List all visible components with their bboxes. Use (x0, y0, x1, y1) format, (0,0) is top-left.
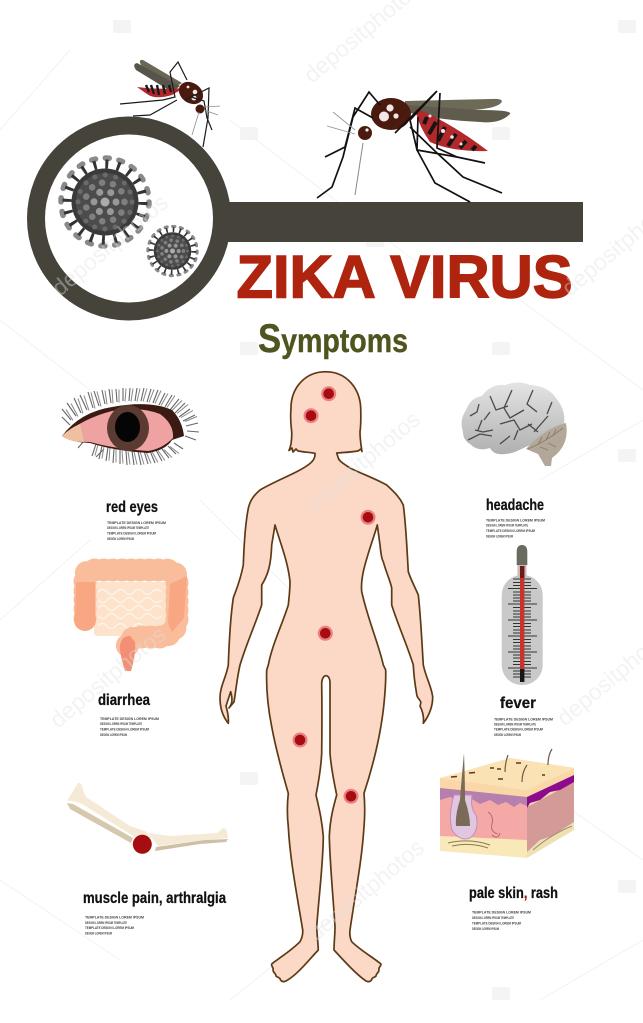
placeholder text: TEMPLATE DESIGN LOREM IPSUM (486, 518, 545, 522)
placeholder text: DESIGN LOREM IPSUM (472, 927, 499, 931)
placeholder text: DESIGN LOREM IPSUM TEMPLATE (494, 722, 536, 726)
label: fever (500, 695, 536, 712)
placeholder text: TEMPLATE DESIGN LOREM IPSUM (494, 728, 543, 732)
label: red eyes (106, 499, 158, 516)
symptom marker: knee (344, 789, 358, 804)
icon: small mosquito (120, 60, 220, 147)
placeholder text: TEMPLATE DESIGN LOREM IPSUM (472, 922, 521, 926)
symptom marker: chest (360, 510, 376, 525)
label: pale skin, rash (469, 885, 558, 902)
panel: fever (494, 545, 553, 737)
subtitle: Symptoms (258, 317, 408, 361)
icon: red eye (62, 388, 199, 465)
symptom marker: abdomen (318, 626, 333, 641)
placeholder text: DESIGN LOREM IPSUM TEMPLATE (486, 524, 528, 528)
placeholder text: DESIGN LOREM IPSUM (85, 932, 112, 936)
label: headache (486, 497, 544, 514)
title: ZIKA VIRUS (236, 244, 572, 310)
placeholder text: DESIGN LOREM IPSUM TEMPLATE (107, 526, 149, 530)
placeholder text: TEMPLATE DESIGN LOREM IPSUM (486, 529, 535, 533)
placeholder text (494, 718, 553, 737)
icon: bone joint (67, 783, 228, 854)
placeholder text: DESIGN LOREM IPSUM (107, 537, 134, 541)
icon: large virus particle (61, 158, 149, 246)
placeholder text (472, 910, 531, 931)
placeholder text: TEMPLATE DESIGN LOREM IPSUM (107, 521, 166, 525)
placeholder text: DESIGN LOREM IPSUM TEMPLATE (85, 921, 127, 925)
icon: intestine (74, 570, 187, 671)
panel: muscle pain, arthralgia (67, 783, 228, 936)
body figure with symptom markers (220, 372, 433, 982)
watermark: depositphotos (303, 834, 429, 946)
icon: skin cross-section (440, 749, 574, 858)
symptom marker: thigh (292, 732, 308, 748)
placeholder text: DESIGN LOREM IPSUM (494, 733, 521, 737)
placeholder text: TEMPLATE DESIGN LOREM IPSUM (100, 717, 159, 721)
placeholder text: DESIGN LOREM IPSUM TEMPLATE (100, 722, 142, 726)
panel: red eyes (62, 388, 199, 541)
placeholder text (486, 518, 545, 538)
watermark: depositphotos (47, 189, 173, 301)
icon: magnifying glass (36, 126, 583, 312)
placeholder text: TEMPLATE DESIGN LOREM IPSUM (107, 532, 156, 536)
placeholder text: TEMPLATE DESIGN LOREM IPSUM (85, 916, 144, 920)
icon: small virus particle (148, 226, 197, 276)
placeholder text: TEMPLATE DESIGN LOREM IPSUM (494, 718, 553, 722)
placeholder text: DESIGN LOREM IPSUM (100, 733, 127, 737)
placeholder text (100, 717, 159, 737)
watermark: depositphotos (45, 621, 171, 733)
icon: large mosquito (317, 91, 510, 202)
symptom marker: head (321, 386, 336, 401)
placeholder text: DESIGN LOREM IPSUM TEMPLATE (472, 916, 514, 920)
label: muscle pain, arthralgia (83, 890, 226, 907)
icon: thermometer (502, 545, 543, 685)
body outline (220, 372, 433, 982)
icon: brain (462, 382, 567, 466)
placeholder text: TEMPLATE DESIGN LOREM IPSUM (472, 910, 531, 914)
panel: headache (462, 382, 567, 538)
panel: diarrhea (74, 570, 187, 737)
placeholder text (85, 916, 144, 936)
symptom marker: forehead (304, 408, 318, 423)
placeholder text: TEMPLATE DESIGN LOREM IPSUM (100, 728, 149, 732)
watermark: depositphotos (299, 406, 425, 518)
placeholder text: DESIGN LOREM IPSUM (486, 534, 513, 538)
panel: pale skin, rash (440, 749, 574, 931)
placeholder text (107, 521, 166, 541)
label: diarrhea (98, 692, 150, 709)
placeholder text: TEMPLATE DESIGN LOREM IPSUM (85, 926, 134, 930)
